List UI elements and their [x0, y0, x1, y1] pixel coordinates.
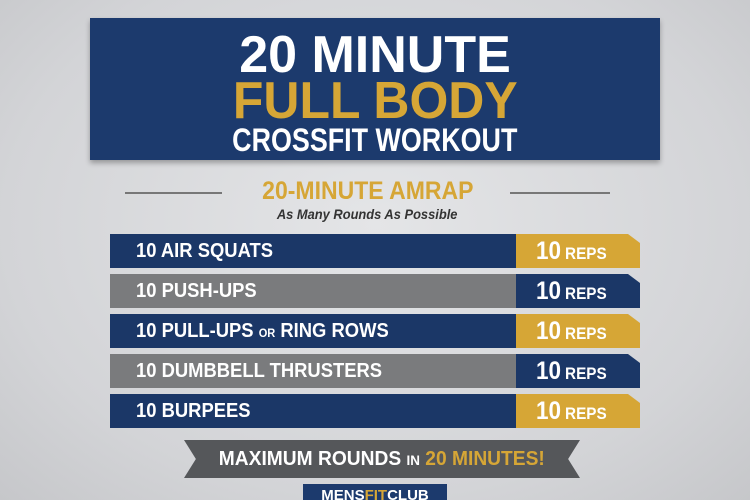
- row: burpees: 10 REPS: [536, 397, 607, 425]
- row: air squats: 10 AIR SQUATS: [136, 240, 273, 262]
- row: air squats: 10 REPS: [536, 237, 607, 265]
- ribbon banner: [184, 440, 580, 478]
- title line 3: CROSSFIT WORKOUT: [232, 122, 518, 158]
- row: push-ups: [110, 274, 640, 308]
- row: thrusters: 10 DUMBBELL THRUSTERS: [136, 360, 382, 382]
- row: burpees: [110, 394, 640, 428]
- row: pull-ups: 10 REPS: [536, 317, 607, 345]
- logo: [303, 484, 447, 500]
- row: thrusters: 10 REPS: [536, 357, 607, 385]
- title line 2: FULL BODY: [233, 72, 517, 130]
- title line 1: 20 MINUTE: [239, 26, 511, 84]
- row: thrusters: [110, 354, 640, 388]
- row: push-ups: 10 REPS: [536, 277, 607, 305]
- subtitle: AMRAP: [125, 177, 610, 222]
- subtitle: AMRAP: 20-MINUTE AMRAP: [262, 177, 473, 205]
- title banner: [90, 18, 660, 160]
- subtitle: AMRAP: As Many Rounds As Possible: [277, 206, 458, 222]
- row: push-ups: 10 PUSH-UPS: [136, 280, 257, 302]
- row: air squats: [110, 234, 640, 268]
- ribbon banner: MAXIMUM ROUNDS IN 20 MINUTES!: [219, 448, 545, 470]
- row: pull-ups: [110, 314, 640, 348]
- row: pull-ups: 10 PULL-UPS OR RING ROWS: [136, 320, 389, 342]
- row: burpees: 10 BURPEES: [136, 400, 251, 422]
